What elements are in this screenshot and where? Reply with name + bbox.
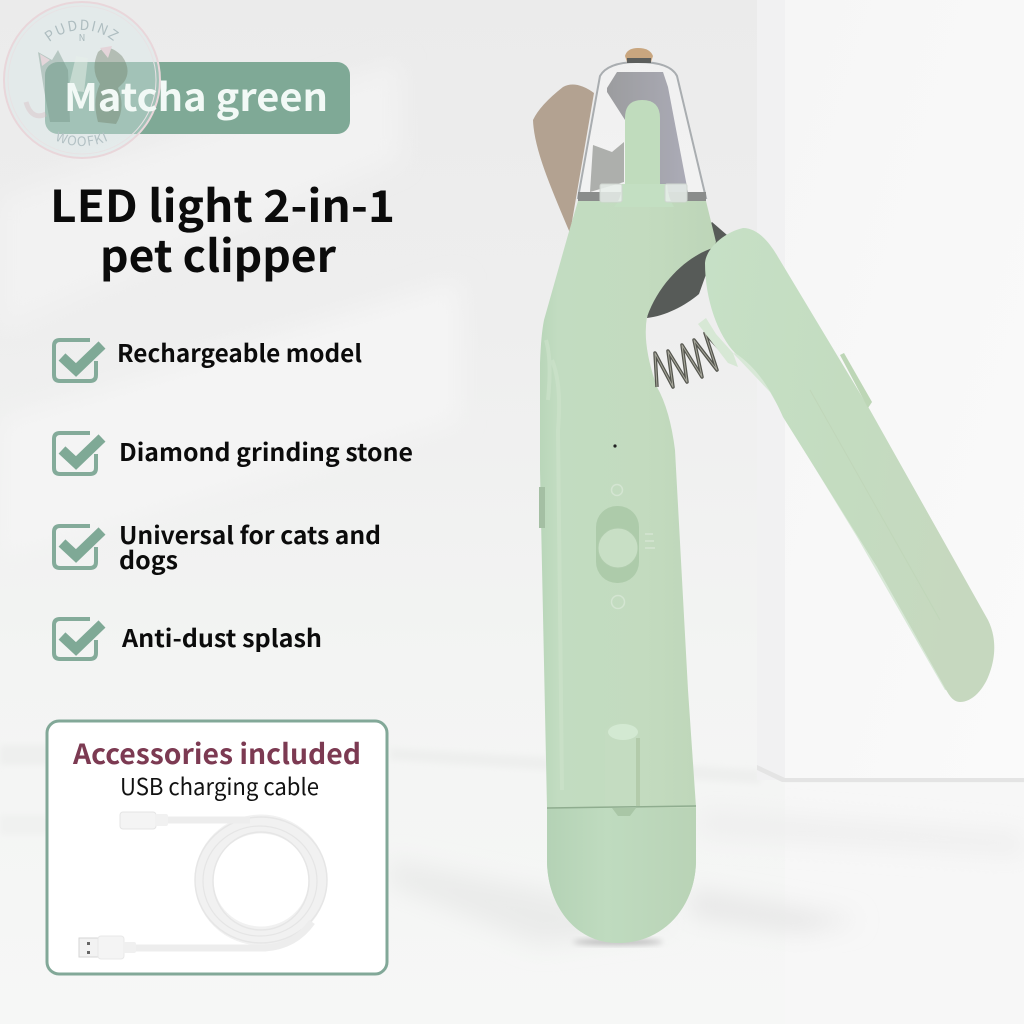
title: pet clipper xyxy=(100,221,337,285)
feature: anti-dust splash xyxy=(54,619,322,659)
watermark brand text: PUDDINZ xyxy=(44,20,119,42)
grinding stone xyxy=(533,85,594,233)
watermark dog xyxy=(94,46,128,124)
indicator dot xyxy=(613,444,617,448)
left cover clip xyxy=(600,184,622,202)
watermark logo xyxy=(3,1,161,159)
feature: diamond grinding stone xyxy=(54,433,413,474)
feature: universal for cats and dogs: dogs xyxy=(119,541,178,576)
panel: accessories included xyxy=(47,721,387,974)
accessories heading: Accessories included xyxy=(72,733,361,773)
feature: universal for cats and dogs: Universal for cats and xyxy=(119,516,381,551)
feature: rechargeable model xyxy=(54,334,362,381)
icon: checkbox xyxy=(54,340,102,381)
slider slot xyxy=(596,506,639,583)
lever clip by spring xyxy=(698,318,738,367)
sanding knob xyxy=(625,48,653,62)
right cover clip xyxy=(665,184,687,202)
main body xyxy=(540,201,716,943)
contact shadow xyxy=(573,939,663,945)
round blade disc xyxy=(647,222,727,318)
icon: checkbox xyxy=(54,526,102,568)
colour label text: Matcha green xyxy=(64,67,328,122)
battery marks xyxy=(645,534,655,548)
watermark n: N xyxy=(79,31,85,44)
side port tab xyxy=(539,487,545,528)
lever centre crease xyxy=(810,390,940,620)
title xyxy=(50,171,395,285)
cap xyxy=(547,808,696,943)
green post on head xyxy=(625,100,660,185)
watermark cat xyxy=(26,50,70,122)
USB charging cable illustration xyxy=(79,812,327,959)
icon: checkbox xyxy=(54,433,102,474)
cap seam xyxy=(547,806,696,808)
clear LED cover xyxy=(578,62,706,198)
lever under strip xyxy=(733,353,960,690)
feature: universal for cats and dogs xyxy=(54,516,381,576)
icon: checkbox xyxy=(54,619,102,659)
watermark woofki: WOOFKI xyxy=(57,132,107,146)
spring xyxy=(655,333,733,387)
watermark paws xyxy=(68,56,88,92)
title: LED light 2-in-1 xyxy=(50,171,395,235)
product: LED pet nail clipper xyxy=(533,48,994,945)
slider knob xyxy=(598,528,638,568)
accessories subheading: USB charging cable xyxy=(120,768,319,802)
lever handle xyxy=(705,228,994,702)
feature: anti-dust splash: Anti-dust splash xyxy=(121,619,322,654)
upper blade under cover xyxy=(607,72,688,192)
post base xyxy=(614,184,674,207)
feature: diamond grinding stone: Diamond grinding stone xyxy=(119,433,413,468)
bottom mode icon xyxy=(612,596,624,608)
lower body post xyxy=(605,723,640,816)
top mode icon xyxy=(612,484,622,496)
lower blade under cover xyxy=(590,142,624,192)
feature: rechargeable model: Rechargeable model xyxy=(117,334,362,369)
lever side buttons xyxy=(840,353,872,408)
body left ridges xyxy=(546,340,562,790)
colour label pill xyxy=(45,62,350,134)
